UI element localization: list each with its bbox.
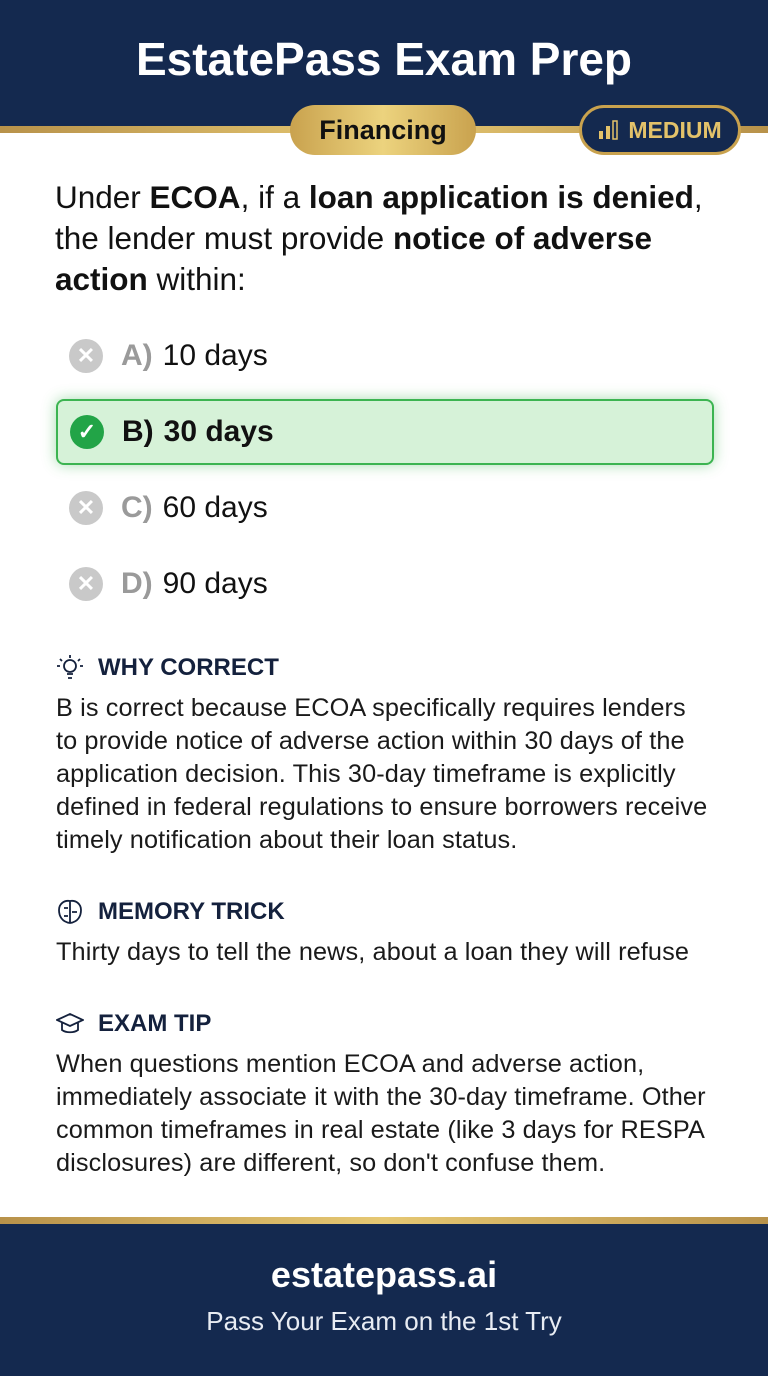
option A xyxy=(69,339,268,373)
text: why correct: application decision. This 30-day timeframe is explicitly xyxy=(56,760,676,788)
question: the lender must provide notice of adverse xyxy=(55,220,652,256)
option A: A) xyxy=(121,339,153,372)
text: why correct: defined in federal regulations to ensure borrowers receive xyxy=(56,793,707,821)
header band xyxy=(0,0,768,127)
text: why correct: B is correct because ECOA specifically requires lenders xyxy=(56,694,686,722)
title: EstatePass Exam Prep xyxy=(136,33,632,85)
text: exam tip: common timeframes in real estate (like 3 days for RESPA xyxy=(56,1116,705,1144)
option C: C) xyxy=(121,491,153,524)
text: why correct: to provide notice of adverse action within 30 days of the xyxy=(56,727,685,755)
question xyxy=(55,179,703,297)
text: exam tip: immediately associate it with the 30-day timeframe. Other xyxy=(56,1083,706,1111)
text: exam tip: When questions mention ECOA and adverse action, xyxy=(56,1050,644,1078)
option D: 90 days xyxy=(163,567,268,600)
option D: D) xyxy=(121,567,153,600)
heading: exam tip: EXAM TIP xyxy=(98,1010,211,1037)
option B correct xyxy=(56,399,714,465)
option B correct: ✓ xyxy=(78,419,96,444)
question: action within: xyxy=(55,261,246,297)
option D: ✕ xyxy=(77,571,95,596)
option C: 60 days xyxy=(163,491,268,524)
badge: Financing: Financing xyxy=(319,114,447,144)
option A: ✕ xyxy=(77,343,95,368)
text: why correct xyxy=(56,694,707,854)
text: exam tip: disclosures) are different, so don't confuse them. xyxy=(56,1149,605,1177)
option B correct: 30 days xyxy=(164,415,274,448)
option C xyxy=(69,491,268,525)
option C: ✕ xyxy=(77,495,95,520)
option A: 10 days xyxy=(163,339,268,372)
badge: MEDIUM xyxy=(579,105,741,155)
text: exam tip xyxy=(56,1050,706,1177)
option B correct: B) xyxy=(122,415,154,448)
text: memory trick: Thirty days to tell the news, about a loan they will refuse xyxy=(56,938,689,966)
footer tagline: Pass Your Exam on the 1st Try xyxy=(206,1306,562,1336)
badge: MEDIUM: MEDIUM xyxy=(628,116,722,142)
question: Under ECOA, if a loan application is denied, xyxy=(55,179,703,215)
badge: Financing xyxy=(290,105,476,155)
heading: why correct: WHY CORRECT xyxy=(98,654,279,681)
text: why correct: timely notification about their loan status. xyxy=(56,826,517,854)
heading: memory trick: MEMORY TRICK xyxy=(98,898,285,925)
footer xyxy=(0,1224,768,1376)
option D xyxy=(69,567,268,601)
footer url: estatepass.ai xyxy=(271,1254,497,1295)
